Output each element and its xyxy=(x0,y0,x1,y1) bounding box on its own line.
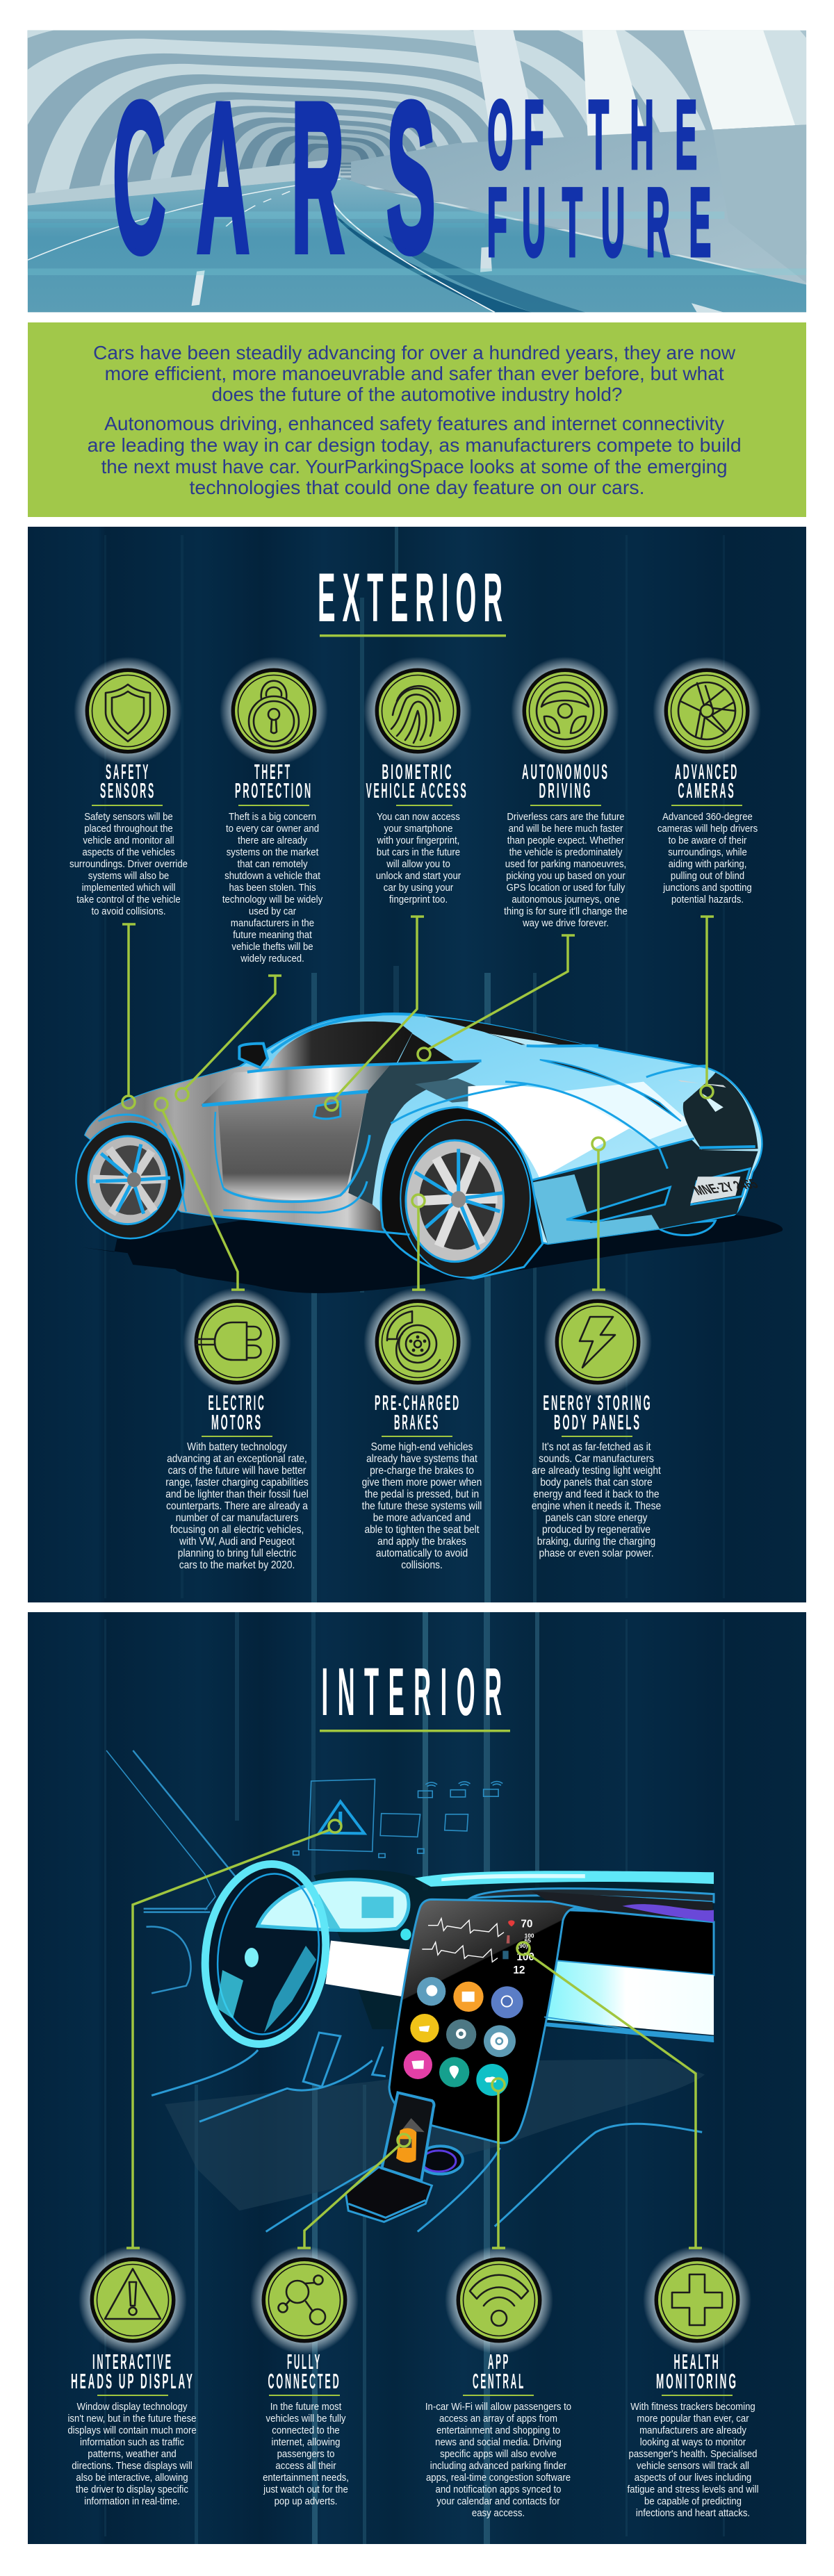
column: energy storing body panels xyxy=(532,1288,662,1559)
column: autonomous driving xyxy=(504,657,628,928)
text: specific apps will also evolve xyxy=(440,2447,557,2459)
text: range, faster charging capabilities xyxy=(165,1476,309,1488)
intro paragraph 2: the next must have car. YourParkingSpace looks at some of the emerging xyxy=(101,456,728,477)
text: and apply the brakes xyxy=(377,1535,466,1548)
rear quarter window xyxy=(398,1033,455,1063)
title: INTERACTIVE xyxy=(92,2349,173,2374)
text: that can remotely xyxy=(237,858,308,869)
text: advancing at an exceptional rate, xyxy=(167,1452,307,1465)
connector lines: interior xyxy=(126,1820,702,2248)
dashboard illustration xyxy=(106,1750,714,2231)
charger base xyxy=(345,2167,432,2222)
text: thing is for sure it'll change the xyxy=(504,905,628,917)
intro paragraph 1: Cars have been steadily advancing for over a hundred years, they are now xyxy=(93,342,736,363)
title: BIOMETRIC xyxy=(382,760,453,784)
tablet xyxy=(389,1899,714,2143)
cup holder xyxy=(418,2146,463,2174)
text: and be lighter than their fossil fuel xyxy=(165,1488,309,1500)
icon: steering wheel xyxy=(511,657,619,765)
icon: padlock xyxy=(220,657,328,765)
text: technology will be widely xyxy=(222,893,323,905)
text: implemented which will xyxy=(82,881,175,893)
column: pre-charged brakes: PRE-CHARGED xyxy=(375,1390,461,1415)
text: able to tighten the seat belt xyxy=(364,1523,480,1536)
text: connected to the xyxy=(272,2424,340,2436)
title: THEFT xyxy=(254,760,292,784)
title: APP xyxy=(488,2349,510,2374)
text: passenger's health. Specialised xyxy=(629,2447,757,2459)
text: phase or even solar power. xyxy=(539,1547,654,1559)
centre display strip xyxy=(471,1889,714,1902)
text: will allow you to xyxy=(386,858,450,869)
text: surroundings. Driver override xyxy=(70,858,188,869)
text: cars to the market by 2020. xyxy=(179,1559,295,1571)
hero title: FUTURE: T xyxy=(562,168,582,277)
hero title: FUTURE: R xyxy=(646,168,670,277)
front wheel xyxy=(76,1122,185,1238)
right black display xyxy=(553,1910,714,1975)
panel: exterior: EXTERIOR xyxy=(318,559,509,636)
title: HEALTH xyxy=(674,2349,720,2374)
hero title: OF THE: O xyxy=(487,81,513,190)
hero title: FUTURE xyxy=(487,168,711,277)
text: sounds. Car manufacturers xyxy=(539,1452,654,1465)
text: vehicles will be fully xyxy=(265,2412,346,2424)
text: In the future most xyxy=(270,2400,341,2412)
intro paragraph 2: Autonomous driving, enhanced safety features and internet connectivity xyxy=(104,413,724,434)
tablet: 100 xyxy=(525,1932,534,1939)
text: With battery technology xyxy=(187,1441,287,1453)
text: your calendar and contacts for xyxy=(436,2495,560,2507)
hero title: OF THE: T xyxy=(589,81,609,190)
steering wheel xyxy=(195,1857,336,2051)
text: number of car manufacturers xyxy=(176,1511,298,1524)
bumper intake xyxy=(566,1187,670,1222)
text: systems will also be xyxy=(88,869,169,881)
dashboard body xyxy=(258,1870,714,2035)
ECG traces xyxy=(428,1919,504,1937)
tablet: 70 xyxy=(521,1918,532,1930)
text: In-car Wi-Fi will allow passengers to xyxy=(425,2400,571,2412)
white hot highlight on rear wing xyxy=(468,1085,638,1179)
upper door band xyxy=(201,1065,391,1106)
phone on wireless charger xyxy=(345,2092,463,2222)
column: fully connected: CONNECTED xyxy=(268,2369,341,2393)
column: safety sensors xyxy=(70,657,188,917)
text: than people expect. Whether xyxy=(507,834,625,846)
door handle xyxy=(314,1101,341,1119)
number plate xyxy=(690,1169,761,1204)
column: autonomous driving: AUTONOMOUS xyxy=(522,760,610,784)
rear windscreen xyxy=(425,1017,585,1044)
phone body xyxy=(382,2092,434,2181)
rear wheel xyxy=(381,1107,543,1279)
text: aspects of the vehicles xyxy=(82,846,175,858)
text: way we drive forever. xyxy=(522,917,609,928)
text: but cars in the future xyxy=(377,846,460,858)
hero title: FUTURE: E xyxy=(689,168,711,277)
icon: camera aperture xyxy=(653,657,761,765)
intro paragraph 1: does the future of the automotive industry hold? xyxy=(211,384,623,405)
floating heads-up display graphics xyxy=(106,1750,502,1993)
column: app central: CENTRAL xyxy=(473,2369,525,2393)
lower door panel xyxy=(218,1093,367,1200)
intro paragraph 2: technologies that could one day feature on our cars. xyxy=(189,477,644,498)
lower cabin floor shadow xyxy=(165,2059,705,2210)
text: focusing on all electric vehicles, xyxy=(170,1523,304,1536)
text: take control of the vehicle xyxy=(76,893,181,905)
text: cars of the future will have better xyxy=(168,1464,306,1477)
text: Driverless cars are the future xyxy=(507,810,625,822)
text: With fitness trackers becoming xyxy=(630,2400,755,2412)
hero title: CARS: R xyxy=(291,58,344,297)
text: aiding with parking, xyxy=(669,858,746,869)
text: directions. These displays will xyxy=(72,2459,193,2471)
text: there are already xyxy=(238,834,308,846)
hero title: CARS: C xyxy=(113,58,165,297)
column: electric motors: ELECTRIC xyxy=(208,1390,265,1415)
right white strip xyxy=(538,1961,714,2035)
tablet: 65 xyxy=(525,1937,531,1944)
text: the driver to display specific xyxy=(76,2483,188,2495)
text: Theft is a big concern xyxy=(229,810,316,822)
column: safety sensors: SAFETY xyxy=(106,760,150,784)
text: collisions. xyxy=(401,1559,443,1571)
icon: shield xyxy=(74,657,182,765)
icon: fingerprint xyxy=(363,657,472,765)
text: be more advanced and xyxy=(373,1511,471,1524)
text: fingerprint too. xyxy=(389,893,448,905)
hero title: OF THE xyxy=(487,81,697,190)
hero title: FUTURE: U xyxy=(601,168,625,277)
text: engine when it needs it. These xyxy=(532,1500,661,1512)
hero title: FUTURE: F xyxy=(487,168,507,277)
heart rate readout xyxy=(508,1920,515,1926)
text: more popular than ever, car xyxy=(637,2412,749,2424)
text: looking at ways to monitor xyxy=(640,2436,746,2447)
text: placed throughout the xyxy=(84,822,173,834)
text: to be aware of their xyxy=(669,834,747,846)
icon: warning triangle xyxy=(79,2246,187,2354)
text: the future these systems will xyxy=(362,1500,482,1512)
orange car on phone xyxy=(396,2128,416,2163)
text: junctions and spotting xyxy=(662,881,752,893)
text: GPS location or used for fully xyxy=(507,881,626,893)
icon: network nodes xyxy=(250,2246,359,2354)
text: internet, allowing xyxy=(272,2436,340,2447)
column: advanced cameras: CAMERAS xyxy=(678,778,735,803)
intro paragraph 2: are leading the way in car design today, as manufacturers compete to build xyxy=(88,434,742,456)
car illustration xyxy=(76,1014,783,1293)
column: fully connected xyxy=(250,2246,359,2507)
icon: lightning bolt xyxy=(543,1288,652,1396)
text: be capable of predicting xyxy=(644,2495,742,2507)
text: cameras will help drivers xyxy=(657,822,758,834)
text: Some high-end vehicles xyxy=(371,1441,473,1453)
text: surroundings, while xyxy=(668,846,747,858)
hero title: CARS: A xyxy=(197,58,250,297)
panel: exterior: VEHICLE ACCESS xyxy=(366,778,468,803)
text: access an array of apps from xyxy=(439,2412,557,2424)
connector lines: exterior xyxy=(122,917,714,1290)
text: You can now access xyxy=(377,810,460,822)
text: has been stolen. This xyxy=(229,881,316,893)
hero title: OF THE: H xyxy=(630,81,654,190)
lower cabin outlines xyxy=(152,2033,702,2231)
tail lights xyxy=(540,1060,681,1121)
column: electric motors: MOTORS xyxy=(211,1410,263,1434)
hero title: CARS xyxy=(113,58,436,297)
text: to avoid collisions. xyxy=(92,905,165,917)
text: used for parking manoeuvres, xyxy=(505,858,626,869)
text: fatigue and stress levels and will xyxy=(627,2483,759,2495)
hero title: OF THE: F xyxy=(523,81,544,190)
text: give them more power when xyxy=(362,1476,482,1488)
text: news and social media. Driving xyxy=(435,2436,562,2447)
intro paragraph 1: more efficient, more manoeuvrable and safer than ever before, but what xyxy=(105,363,724,384)
dash white strip xyxy=(325,1941,409,1996)
text: patterns, weather and xyxy=(88,2447,177,2459)
text: body panels that can store xyxy=(540,1476,653,1488)
text: just watch out for the xyxy=(263,2483,348,2495)
text: apps, real-time congestion software xyxy=(426,2471,571,2483)
column: advanced cameras: ADVANCED xyxy=(675,760,739,784)
panel: exterior: PROTECTION xyxy=(235,778,313,803)
text: infections and heart attacks. xyxy=(636,2507,750,2518)
text: Safety sensors will be xyxy=(84,810,173,822)
rear quarter shading xyxy=(348,1061,482,1204)
text: manufacturers are already xyxy=(639,2424,747,2436)
text: autonomous journeys, one xyxy=(512,893,620,905)
text: vehicle and monitor all xyxy=(83,834,174,846)
silver door side xyxy=(85,1065,404,1233)
text: to every car owner and xyxy=(226,822,319,834)
column: electric motors xyxy=(165,1288,309,1571)
column: health monitoring xyxy=(627,2246,759,2518)
title: FULLY xyxy=(287,2349,322,2374)
number plate: MNE·ZY 2465 xyxy=(690,1176,761,1198)
text: entertainment and shopping to xyxy=(436,2424,560,2436)
column: biometric vehicle access xyxy=(363,657,472,905)
panel: introduction xyxy=(28,322,806,517)
text: Window display technology xyxy=(76,2400,188,2412)
text: counterparts. There are already a xyxy=(166,1500,309,1512)
text: picking you up based on your xyxy=(506,869,626,881)
icon: plug xyxy=(183,1288,291,1396)
text: already have systems that xyxy=(366,1452,478,1465)
text: information such as traffic xyxy=(80,2436,184,2447)
app icons xyxy=(417,1977,445,2005)
text: and notification apps synced to xyxy=(435,2483,562,2495)
text: future meaning that xyxy=(233,928,312,940)
text: used by car xyxy=(249,905,296,917)
column: advanced cameras xyxy=(653,657,761,905)
text: systems on the market xyxy=(227,846,318,858)
hero title: CARS: S xyxy=(386,58,436,297)
panel: interior: HEADS UP DISPLAY xyxy=(71,2369,195,2393)
text: manufacturers in the xyxy=(231,917,314,928)
text: unlock and start your xyxy=(376,869,461,881)
lower bumper xyxy=(532,1140,758,1244)
column: safety sensors: SENSORS xyxy=(100,778,156,803)
text: braking, during the charging xyxy=(537,1535,655,1548)
text: the vehicle is predominately xyxy=(509,846,623,858)
tablet: 12 xyxy=(513,1964,525,1976)
tablet: (90) xyxy=(518,1942,528,1949)
icon: wifi xyxy=(445,2246,553,2354)
panel: interior xyxy=(28,1612,806,2544)
text: the pedal is pressed, but in xyxy=(365,1488,479,1500)
text: pre-charge the brakes to xyxy=(370,1464,474,1477)
car body base xyxy=(85,1014,762,1244)
text: pop up adverts. xyxy=(275,2495,337,2507)
text: It's not as far-fetched as it xyxy=(542,1441,651,1453)
text: displays will contain much more xyxy=(67,2424,197,2436)
text: energy and feed it back to the xyxy=(533,1488,660,1500)
column: energy storing body panels: BODY PANELS xyxy=(554,1410,641,1434)
column: pre-charged brakes xyxy=(362,1288,482,1571)
text: entertainment needs, xyxy=(263,2471,349,2483)
text: including advanced parking finder xyxy=(430,2459,566,2471)
text: Advanced 360-degree xyxy=(662,810,753,822)
text: planning to bring full electric xyxy=(178,1547,297,1559)
hero banner xyxy=(28,31,806,313)
text: produced by regenerative xyxy=(542,1523,651,1536)
column: interactive heads up display xyxy=(67,2246,197,2507)
text: automatically to avoid xyxy=(376,1547,468,1559)
text: vehicle sensors will track all xyxy=(637,2459,749,2471)
text: car by using your xyxy=(384,881,453,893)
hero tunnel photo xyxy=(28,31,806,313)
text: easy access. xyxy=(472,2507,525,2518)
blue contour lines xyxy=(99,1014,755,1235)
text: panels can store energy xyxy=(546,1511,648,1524)
text: your smartphone xyxy=(384,822,453,834)
heading: interior xyxy=(320,1654,512,1732)
text: potential hazards. xyxy=(671,893,744,905)
hero title: FUTURE: U xyxy=(522,168,546,277)
text: information in real-time. xyxy=(84,2495,180,2507)
title: BRAKES xyxy=(394,1410,440,1434)
column: app central xyxy=(425,2246,571,2518)
text: pulling out of blind xyxy=(671,869,744,881)
tail panel xyxy=(683,1072,758,1150)
tablet: 100 xyxy=(516,1951,534,1963)
instrument cluster xyxy=(258,1880,409,1930)
text: passengers to xyxy=(277,2447,335,2459)
text: isn't new, but in the future these xyxy=(68,2412,197,2424)
text: and will be here much faster xyxy=(509,822,623,834)
panel: exterior xyxy=(28,527,806,1602)
column: theft protection xyxy=(220,657,328,964)
icon: medical cross xyxy=(643,2246,751,2354)
panel: exterior: ENERGY STORING xyxy=(543,1390,652,1415)
text: aspects of our lives including xyxy=(635,2471,751,2483)
side window xyxy=(268,1022,412,1068)
text: widely reduced. xyxy=(240,952,304,964)
title: DRIVING xyxy=(539,778,592,803)
hero title: OF THE: E xyxy=(675,81,697,190)
text: with VW, Audi and Peugeot xyxy=(179,1535,295,1548)
car shadow xyxy=(83,1215,783,1293)
text: also be interactive, allowing xyxy=(76,2471,188,2483)
icon: brake disc xyxy=(363,1288,472,1396)
heading: exterior xyxy=(318,559,509,637)
text: access all their xyxy=(275,2459,336,2471)
text: shutdown a vehicle that xyxy=(224,869,320,881)
right edge highlight xyxy=(544,2017,714,2042)
wing mirror xyxy=(239,1044,268,1068)
text: are already testing light weight xyxy=(532,1464,662,1477)
steering wheel hollow xyxy=(195,1857,336,2051)
text: vehicle thefts will be xyxy=(231,940,313,952)
text: with your fingerprint, xyxy=(377,834,459,846)
far rear wheel xyxy=(654,1221,715,1236)
